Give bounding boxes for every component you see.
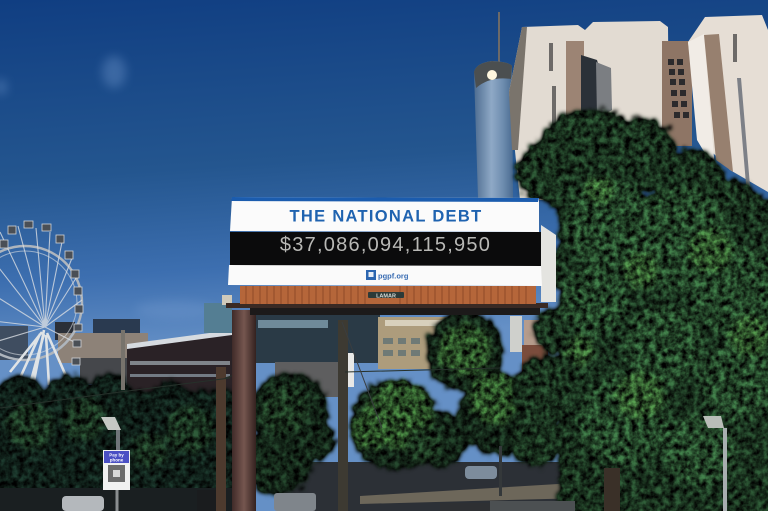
pay by phone parking sign: Pay by: [109, 452, 124, 458]
road and parking lot: [0, 462, 585, 511]
street lamp left: [101, 417, 121, 450]
mid-ground city buildings: [0, 295, 548, 397]
parked cars: [62, 466, 497, 511]
orange metal backing: [240, 286, 536, 304]
ferris wheel: [0, 221, 83, 386]
white high-rise buildings: [509, 15, 768, 200]
clouds: [0, 56, 215, 319]
pay by phone parking sign: phone: [110, 458, 124, 462]
billboard: [228, 197, 556, 304]
trees: large right group: [510, 109, 768, 511]
heading: THE NATIONAL DEBT: [290, 208, 482, 226]
debt counter panel: [230, 232, 541, 266]
debt amount: $37,086,094,115,950: [280, 234, 491, 256]
utility poles and wires: [0, 320, 500, 511]
pay by phone parking sign: [103, 450, 130, 511]
pgpf logo: pgpf.org: [378, 272, 409, 280]
Lamar logo plate: [368, 292, 404, 299]
tree trunk and street furniture right: [490, 416, 727, 511]
top panel: [230, 197, 539, 232]
billboard catwalk beam: [226, 303, 548, 315]
bottom panel: [228, 265, 542, 286]
Lamar logo plate: LAMAR: [376, 293, 396, 299]
white side wall: [541, 225, 556, 302]
trees: centre group: [244, 314, 540, 494]
pgpf logo: [366, 270, 409, 280]
glass tower: [474, 12, 513, 198]
trees: left group: [0, 375, 235, 511]
billboard support column: [232, 310, 256, 511]
